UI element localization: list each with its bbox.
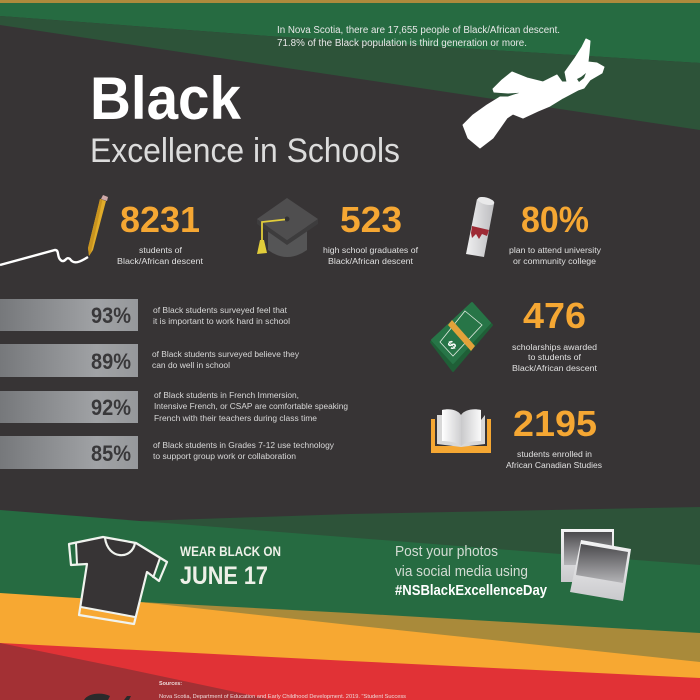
stat: 2195 students enrolled: students enrolled in: [517, 449, 592, 459]
stat: 476 scholarships: scholarships awarded: [512, 342, 597, 352]
intro text: In Nova Scotia, there are 17,655 people of Black/African descent.: [277, 25, 560, 36]
title: Black: [90, 65, 242, 132]
callout: wear black on June 17: JUNE 17: [180, 562, 268, 590]
icon: diploma scroll: [466, 195, 495, 257]
intro text: 71.8% of the Black population is third generation or more.: [277, 38, 527, 49]
icon: graduation cap: [257, 198, 318, 257]
icon: open book: [431, 409, 491, 453]
text: 93% description: of Black students surveyed feel that: [153, 305, 288, 315]
callout: post your photos: [395, 543, 548, 599]
stat: 523 graduates: Black/African descent: [328, 256, 414, 266]
stat: 523 graduates: [257, 198, 419, 266]
icon: polaroid photos: [561, 529, 631, 601]
bar: 85%: [0, 436, 138, 469]
bar: 89%: [0, 344, 138, 377]
icon: t-shirt: [69, 537, 167, 624]
title: Excellence in Schools: [90, 132, 400, 170]
callout: post your photos: via social media using: [395, 563, 528, 580]
stat: 8231 students: students of: [139, 245, 183, 255]
sources: [159, 681, 406, 700]
stat: 2195 students enrolled: [431, 403, 602, 470]
stat: 476 scholarships: Black/African descent: [512, 363, 598, 373]
icon: stack of cash: [431, 303, 492, 371]
stat: 80% plan to attend: plan to attend university: [509, 245, 602, 255]
stat: 80% plan to attend: [466, 195, 602, 266]
text: 89% description: [152, 349, 300, 370]
text: 85% description: of Black students in Grades 7-12 use technology: [153, 440, 335, 450]
text: 92% description: French with their teachers during class time: [154, 413, 317, 423]
logo fragment: [84, 694, 131, 700]
bar: 93%: [0, 299, 138, 331]
text: 93% description: [153, 305, 290, 326]
bar: 89%: 89%: [91, 349, 131, 374]
stat: 476 scholarships: 476: [523, 295, 586, 336]
stat: 2195 students enrolled: 2195: [513, 403, 597, 444]
sources: Nova Scotia, Department of Education and Early Childhood Development. 2019. "Student Success: [159, 694, 406, 700]
bar: 92%: [0, 391, 138, 423]
text: 85% description: to support group work or collaboration: [153, 451, 296, 461]
stat: 8231 students: 8231: [120, 199, 200, 240]
sources: Sources:: [159, 681, 182, 687]
stat: 476 scholarships: [431, 295, 598, 373]
text: 92% description: [154, 390, 348, 423]
icon: pencil and squiggle: [0, 195, 108, 265]
text: 92% description: Intensive French, or CSAP are comfortable speaking: [154, 401, 348, 411]
stat: 80% plan to attend: or community college: [513, 256, 596, 266]
callout: wear black on June 17: [180, 543, 281, 590]
intro text: [277, 25, 560, 49]
callout: wear black on June 17: WEAR BLACK ON: [180, 543, 281, 559]
bar: 93%: 93%: [91, 303, 131, 328]
text: 93% description: it is important to work hard in school: [153, 316, 290, 326]
title: [90, 65, 400, 170]
bar: 85%: 85%: [91, 441, 131, 466]
text: 85% description: [153, 440, 335, 461]
text: 92% description: of Black students in French Immersion,: [154, 390, 299, 400]
stat: 80% plan to attend: 80%: [521, 199, 589, 240]
text: 89% description: can do well in school: [152, 360, 230, 370]
stat: 8231 students: Black/African descent: [117, 256, 204, 266]
stat: 2195 students enrolled: African Canadian Studies: [506, 460, 602, 470]
icon: stack of cash: $: [445, 337, 459, 353]
icon: Nova Scotia map: [463, 39, 604, 148]
callout: post your photos: #NSBlackExcellenceDay: [395, 582, 548, 599]
stat: 476 scholarships: to students of: [528, 352, 582, 362]
stat: 8231 students: [0, 195, 204, 266]
stat: 523 graduates: high school graduates of: [323, 245, 419, 255]
bar: 92%: 92%: [91, 395, 131, 420]
callout: post your photos: Post your photos: [395, 543, 498, 560]
stat: 523 graduates: 523: [340, 199, 402, 240]
text: 89% description: of Black students surveyed believe they: [152, 349, 300, 359]
